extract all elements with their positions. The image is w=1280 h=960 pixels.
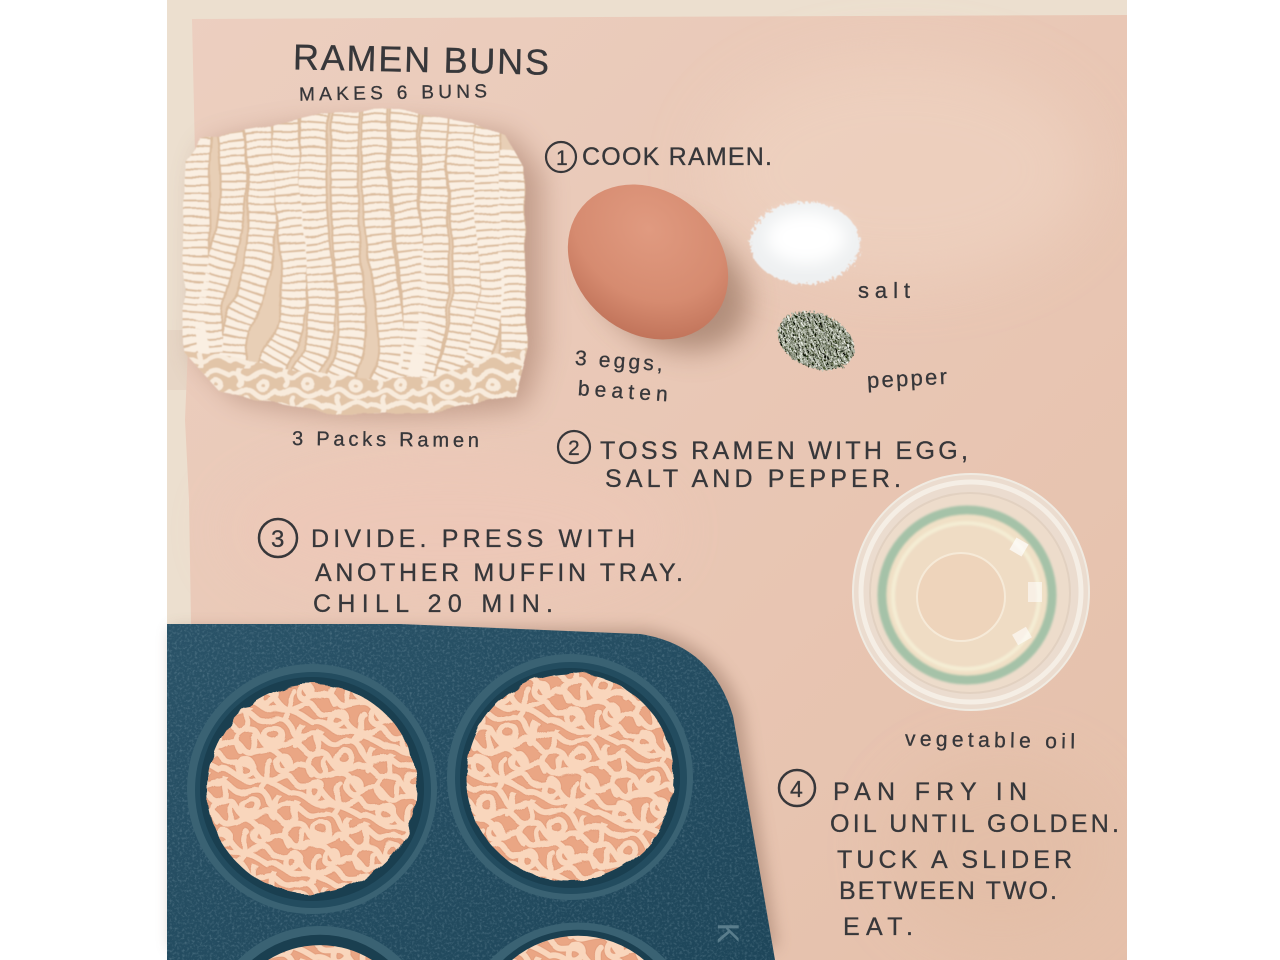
- recipe photo illustration: [162, 0, 1127, 960]
- step 2: [558, 431, 968, 493]
- step 2 number: 2: [568, 437, 580, 460]
- glass bowl of oil: [853, 474, 1089, 710]
- step 4 number: 4: [790, 776, 803, 802]
- step 4 text: TUCK A SLIDER: [837, 846, 1072, 874]
- step 1 text: COOK RAMEN.: [582, 143, 772, 171]
- parchment paper: [167, 15, 1127, 960]
- step 4 text: PAN FRY IN: [833, 778, 1027, 806]
- step 3 text: CHILL 20 MIN.: [313, 590, 553, 618]
- step 2 number: [558, 431, 590, 463]
- step 4 text: BETWEEN TWO.: [839, 877, 1057, 905]
- step 1 number: 1: [556, 147, 568, 170]
- muffin tray: [167, 624, 777, 960]
- step 3 number: 3: [271, 526, 284, 553]
- step 4 text: [830, 778, 1119, 941]
- step 2 text: [600, 437, 968, 493]
- step 1 number: [546, 142, 576, 172]
- step 4 number: [779, 770, 815, 806]
- label: ramen: 3 Packs Ramen: [292, 428, 479, 452]
- tray brand mark: K: [711, 923, 744, 943]
- step 3: [259, 519, 683, 618]
- step 3 text: DIVIDE. PRESS WITH: [311, 525, 635, 553]
- label: pepper: pepper: [866, 364, 948, 393]
- label: eggs: 3 eggs,: [574, 347, 664, 376]
- label: salt: salt: [858, 278, 910, 303]
- ramen brick: [170, 100, 542, 430]
- step 2 text: TOSS RAMEN WITH EGG,: [600, 437, 968, 465]
- egg: [536, 152, 773, 378]
- salt: [750, 202, 860, 284]
- step 4 text: EAT.: [843, 913, 913, 941]
- pepper: [769, 301, 863, 381]
- step 3 number: [259, 519, 297, 557]
- muffin cup bottom left: [238, 926, 402, 960]
- step 4: [779, 770, 1119, 941]
- label: eggs: beaten: [577, 377, 669, 406]
- subtitle: MAKES 6 BUNS: [299, 81, 487, 106]
- muffin cup bottom right: [490, 922, 666, 960]
- step 3 text: ANOTHER MUFFIN TRAY.: [315, 559, 683, 587]
- label: eggs: [572, 347, 671, 406]
- step 1: [546, 142, 772, 172]
- step 4 text: OIL UNTIL GOLDEN.: [830, 810, 1119, 838]
- wood background: [167, 0, 1127, 640]
- label: vegetable oil: vegetable oil: [905, 728, 1075, 753]
- muffin cup left: [187, 664, 437, 914]
- title: RAMEN BUNS: [293, 36, 549, 83]
- muffin cup right: [447, 654, 693, 900]
- step 3 text: [311, 525, 683, 618]
- step 2 text: SALT AND PEPPER.: [605, 465, 901, 493]
